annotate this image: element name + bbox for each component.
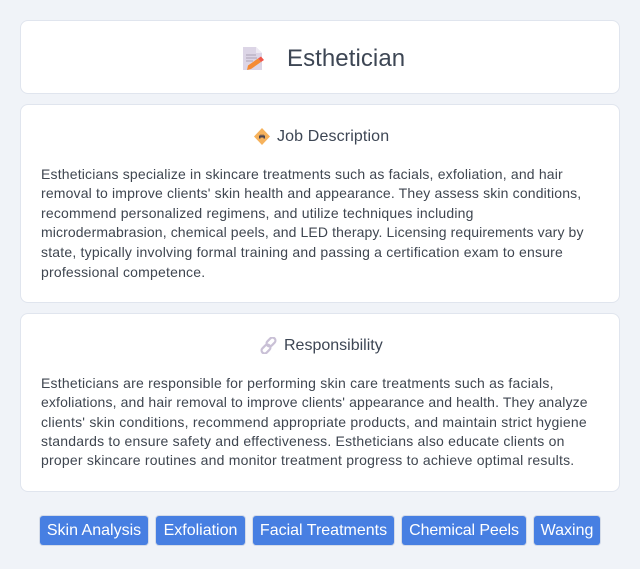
heading: job description: Job Description — [277, 128, 389, 145]
tag: skin analysis: Skin Analysis — [47, 522, 141, 539]
tag: exfoliation: Exfoliation — [164, 522, 237, 539]
text block: responsibility: clients' skin conditions, recommend appropriate products, and maintain strict hygiene — [41, 414, 587, 430]
tag: facial treatments: Facial Treatments — [260, 522, 387, 539]
text block: job description: microdermabrasion, chemical peels, and LED therapy. Licensing requirements vary by — [41, 224, 584, 240]
icon: chain link — [260, 337, 276, 354]
heading: responsibility: Responsibility — [284, 337, 383, 354]
text block: job description: removal to improve clients' skin health and appearance. They assess skin conditions, — [41, 185, 581, 201]
panel: responsibility — [20, 313, 620, 492]
panel: job description — [20, 104, 620, 303]
tag: waxing: Waxing — [541, 522, 593, 539]
text block: responsibility: standards to ensure safety and effectiveness. Estheticians also educate clients on — [41, 433, 565, 449]
tag: chemical peels: Chemical Peels — [409, 522, 519, 539]
panel: title card — [20, 20, 620, 94]
text block: job description: state, typically involving formal training and passing a certification exam to ensure — [41, 244, 563, 260]
text block: job description: Estheticians specialize in skincare treatments such as facials, exfoliation, and hair — [41, 166, 563, 182]
title: Esthetician — [287, 45, 405, 72]
text block: job description: professional competence. — [41, 264, 205, 280]
tag: waxing — [534, 516, 600, 545]
icon: document with pencil — [243, 47, 264, 70]
text block: responsibility: exfoliations, and hair removal to improve clients' appearance and health. They analyze — [41, 394, 588, 410]
tag: skin analysis — [40, 516, 148, 545]
tag: chemical peels — [402, 516, 526, 545]
tag: facial treatments — [253, 516, 394, 545]
text block: job description: recommend personalized regimens, and utilize techniques including — [41, 205, 474, 221]
tag: exfoliation — [156, 516, 245, 545]
text block: responsibility: proper skincare routines and monitor treatment progress to achieve optimal results. — [41, 452, 574, 468]
text block: responsibility: Estheticians are responsible for performing skin care treatments such as facials, — [41, 375, 554, 391]
icon: diamond sign — [254, 128, 270, 145]
